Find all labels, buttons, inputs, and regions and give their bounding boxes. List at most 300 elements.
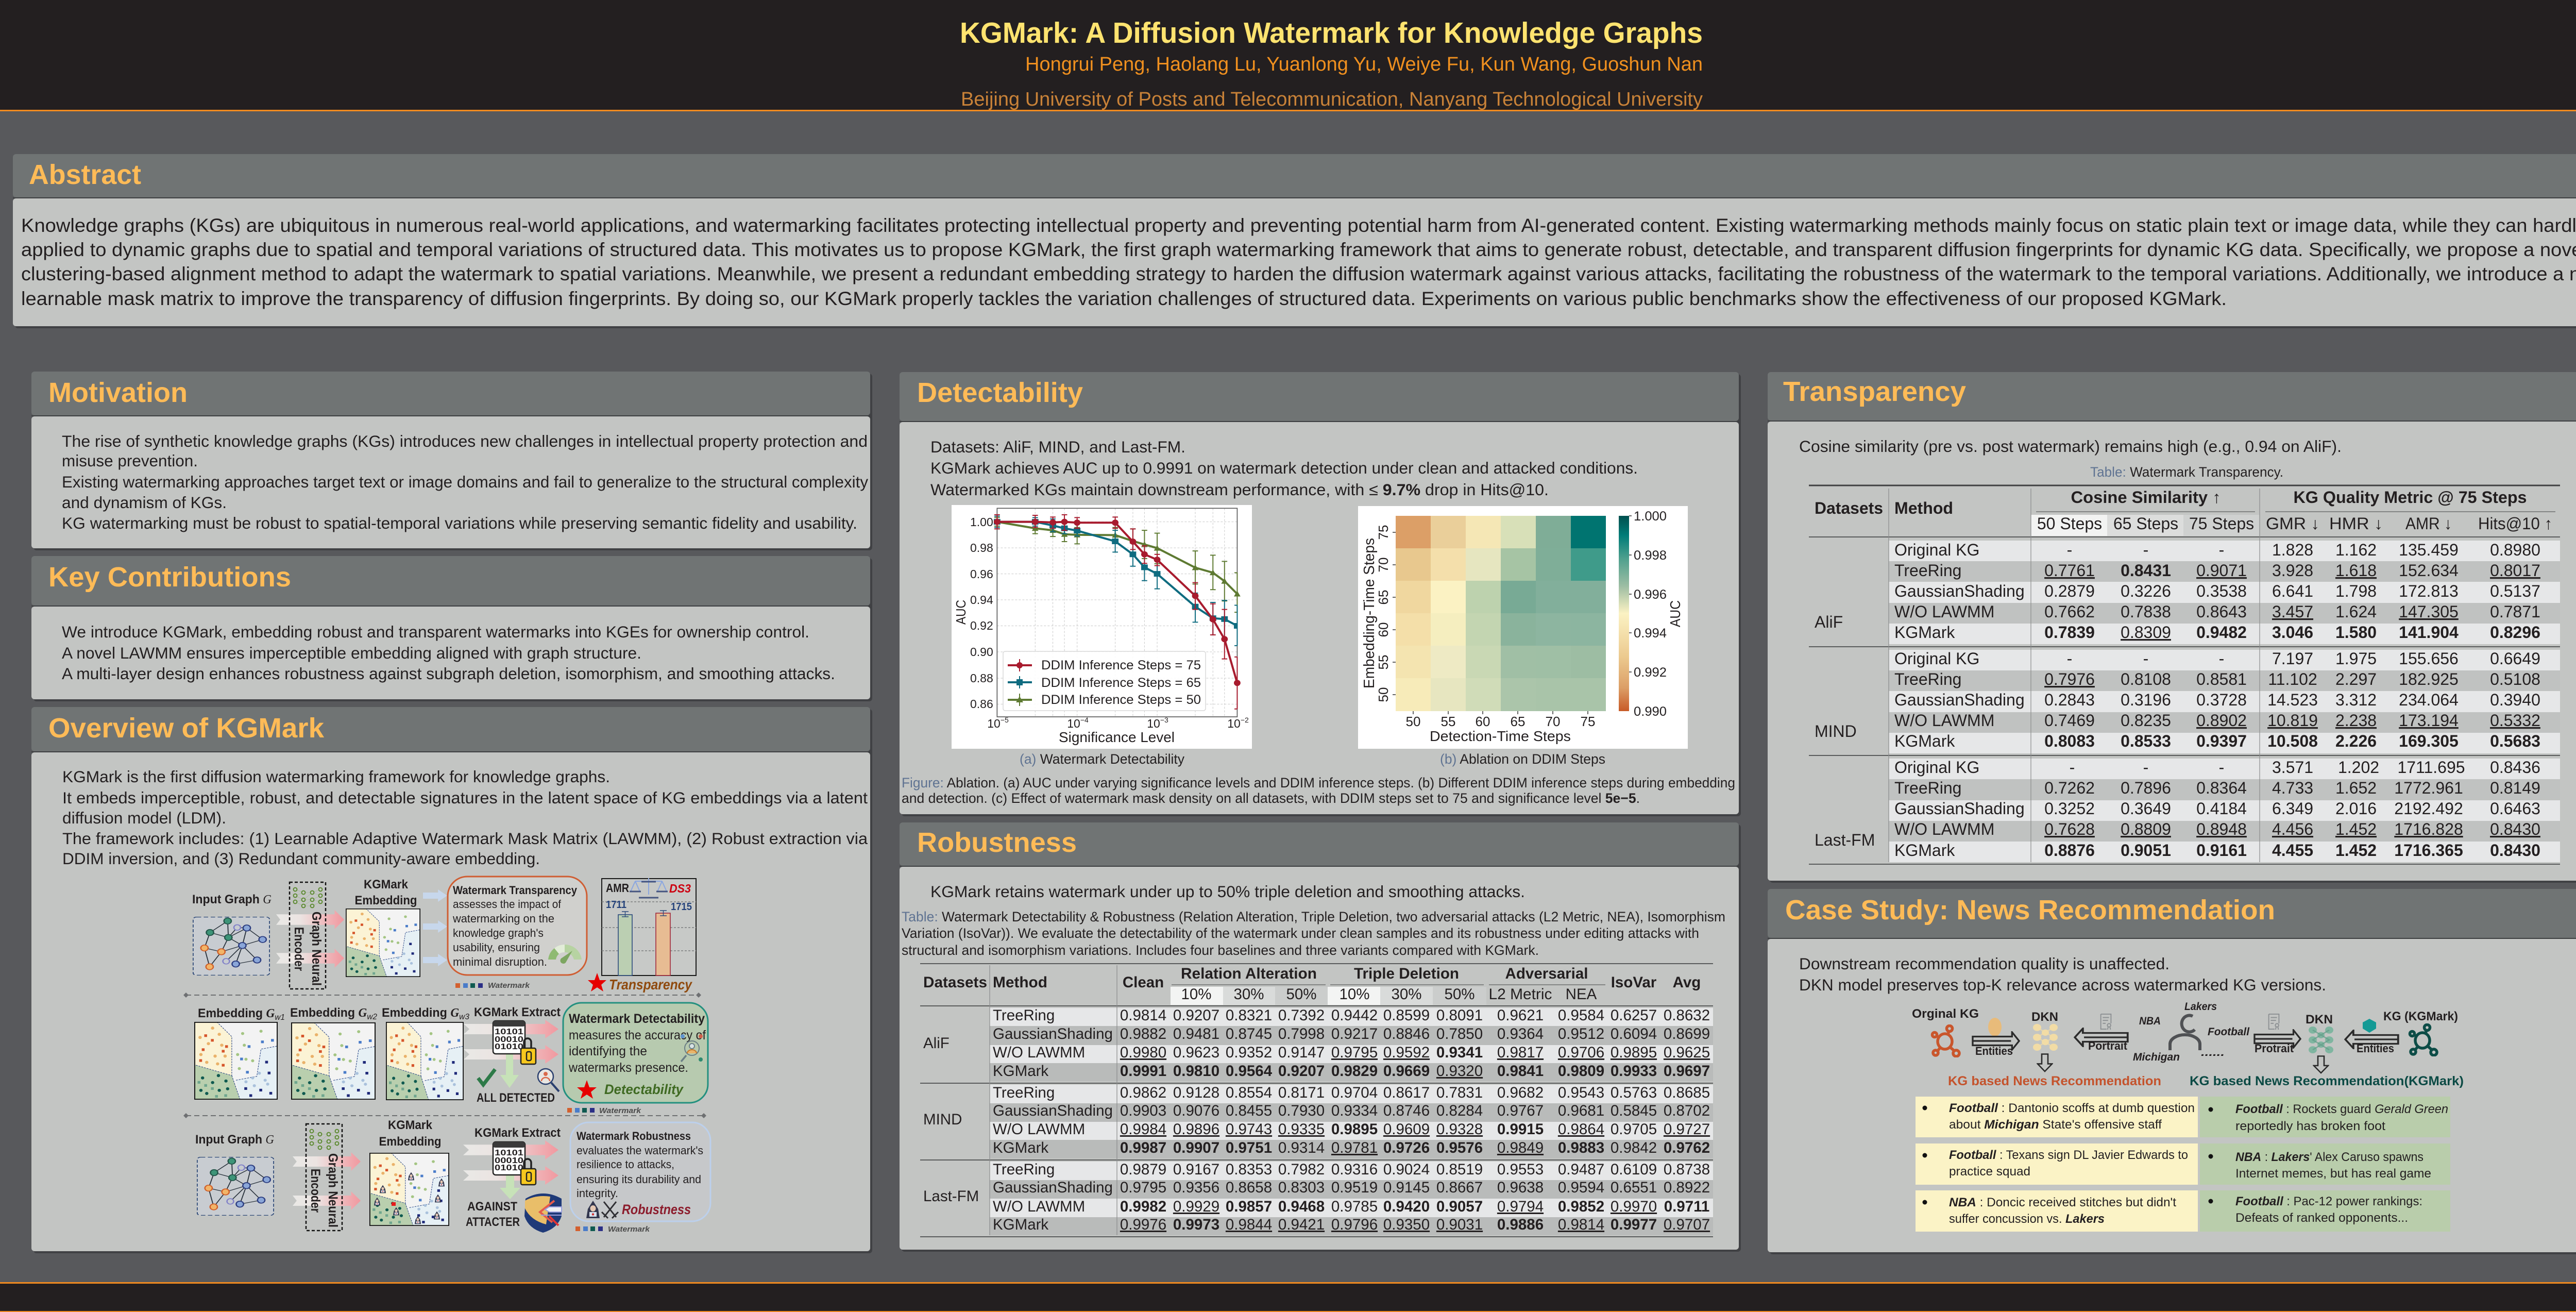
abstract text: Knowledge graphs (KGs) are ubiquitous in numerous real-world applications, and watermarking facilitates protecting intellectual property and preventing potential harm from AI-generated content. Existing watermarking methods mainly focus on static plain text or image data, while they can hardly be <box>21 215 2576 236</box>
x axis label: Significance Level <box>1059 729 1175 745</box>
x axis ticks: 55 <box>1441 714 1455 729</box>
motivation text: misuse prevention. <box>62 451 198 470</box>
graph neural encoder <box>306 1124 342 1231</box>
y axis ticks <box>1376 525 1391 702</box>
table header: 65 Steps <box>2113 514 2178 533</box>
motivation text <box>62 432 868 532</box>
detectability text: KGMark achieves AUC up to 0.9991 on watermark detection under clean and attacked conditions. <box>930 459 1638 477</box>
table group: Last-FM: 0.9051 <box>2121 841 2171 860</box>
table group: Last-FM: 0.9982 <box>1120 1198 1166 1215</box>
table group: AliF: 0.7839 <box>2044 623 2095 642</box>
colour bar ticks: 0.994 <box>1634 626 1667 641</box>
legend: watermark <box>455 981 530 990</box>
table group: MIND: 0.8902 <box>2196 711 2247 730</box>
table group: AliF: 1.580 <box>2335 623 2377 642</box>
table group: AliF: 0.9364 <box>1497 1025 1544 1042</box>
motivation text: KG watermarking must be robust to spatial-temporal variations while preserving semantic fidelity and usability. <box>62 514 857 532</box>
table group: AliF: - <box>2067 541 2072 559</box>
colour bar ticks <box>1629 509 1667 719</box>
table group: MIND: 0.6649 <box>2490 649 2540 668</box>
table group: MIND: 11.102 <box>2268 670 2317 688</box>
table group: MIND: 0.8108 <box>2121 670 2171 688</box>
table group: Last-FM: 0.9879 <box>1120 1161 1166 1178</box>
table header: Cosine Similarity ↑ <box>2071 488 2221 507</box>
table group: Last-FM: 0.9031 <box>1436 1216 1483 1233</box>
table header: 50 Steps <box>2037 514 2102 533</box>
x axis ticks: 70 <box>1546 714 1560 729</box>
y axis ticks: 60 <box>1376 623 1391 637</box>
table header: Avg <box>1673 974 1701 991</box>
table group: AliF: 0.8017 <box>2490 561 2540 580</box>
bar chart: AMR on DS3: DS3 <box>669 882 691 895</box>
panel: case study <box>1768 889 2576 1254</box>
x axis label: Detection-Time Steps <box>1430 728 1571 744</box>
caption: robustness table: structural and isomorphism variations. Includes four baselines and three variants compared with KGMark. <box>902 943 1539 958</box>
table group: AliF: 0.9512 <box>1558 1025 1604 1042</box>
table group: AliF <box>1815 541 2540 642</box>
table group: AliF: 152.634 <box>2399 561 2459 580</box>
legend: DDIM Inference Steps = 75 <box>1041 658 1201 672</box>
colour bar ticks: 0.990 <box>1634 704 1667 719</box>
table group: MIND: 0.8171 <box>1278 1084 1325 1101</box>
table group: Last-FM: GaussianShading <box>1894 799 2025 818</box>
bar chart: AMR on DS3: 1711 <box>606 899 626 911</box>
colour bar ticks: 1.000 <box>1634 509 1667 524</box>
table header: IsoVar <box>1611 974 1657 991</box>
x axis ticks <box>1406 714 1595 729</box>
news list: baseline recommendations: about Michigan State's offensive staff <box>1949 1118 2162 1132</box>
table header: GMR ↓ <box>2266 514 2319 533</box>
table group: MIND: 0.9328 <box>1436 1121 1483 1138</box>
table group: Last-FM: 0.8353 <box>1226 1161 1272 1178</box>
table header <box>923 965 1701 1003</box>
embedding map <box>346 909 420 977</box>
table group: AliF: 147.305 <box>2399 602 2459 621</box>
table group: Last-FM: 0.7262 <box>2044 779 2095 797</box>
table group: MIND: 3.312 <box>2335 691 2377 709</box>
table group: MIND: 0.9862 <box>1120 1084 1166 1101</box>
table header: Datasets <box>923 974 987 991</box>
against attacker label: AGAINST <box>467 1200 517 1214</box>
DKN block (KGMark): DKN <box>2306 1013 2333 1027</box>
table group: MIND: Original KG <box>1894 649 1979 668</box>
table group: Last-FM: 0.9356 <box>1173 1179 1219 1196</box>
line chart: watermark detectability <box>952 505 1252 749</box>
table group: MIND: W/O LAWMM <box>993 1121 1085 1138</box>
table group: AliF: 0.9584 <box>1558 1007 1604 1024</box>
table group: AliF: 0.9481 <box>1173 1025 1219 1042</box>
input graph <box>193 917 269 975</box>
table group: AliF: 0.9352 <box>1226 1044 1272 1061</box>
table group: MIND: 0.8083 <box>2044 732 2095 750</box>
y axis ticks: 0.96 <box>970 567 993 581</box>
caption: subfigures: (b) Ablation on DDIM Steps <box>1440 751 1605 767</box>
table group: Last-FM: TreeRing <box>1894 779 1961 797</box>
table header: Method <box>1894 499 1953 517</box>
x axis ticks <box>987 716 1249 730</box>
table group: Last-FM: 0.9487 <box>1558 1161 1604 1178</box>
table header: 50% <box>1286 986 1317 1003</box>
case study text <box>1799 954 2326 994</box>
divider 1 <box>183 993 701 998</box>
table group: MIND: 0.7930 <box>1278 1102 1325 1119</box>
table group: AliF: 0.8296 <box>2490 623 2540 642</box>
table group: Last-FM: 0.7896 <box>2121 779 2171 797</box>
legend <box>1003 651 1206 711</box>
table group: AliF: AliF <box>1815 613 1843 631</box>
table group: Last-FM: 0.9970 <box>1611 1198 1657 1215</box>
bar chart: AMR on DS3 <box>602 878 696 975</box>
table header: Adversarial <box>1505 965 1588 982</box>
input graph label: Input Graph G <box>195 1133 274 1147</box>
news list: baseline recommendations: Football : Texans sign DL Javier Edwards to <box>1949 1148 2188 1162</box>
input graph label: Input Graph G <box>192 893 272 906</box>
table group: AliF: GaussianShading <box>1894 582 2025 600</box>
table group: Last-FM: 0.6109 <box>1611 1161 1657 1178</box>
KGMark embedding label: Embedding <box>354 894 417 907</box>
arrow: entities to DKN (KGMark) <box>2345 1019 2398 1055</box>
callout: watermark robustness: integrity. <box>577 1187 618 1200</box>
legend: watermark: Watermark <box>599 1106 641 1115</box>
table group: AliF: 0.9814 <box>1120 1007 1166 1024</box>
table group: MIND: 0.9335 <box>1278 1121 1325 1138</box>
table group: Last-FM: 0.9844 <box>1226 1216 1272 1233</box>
table group: Last-FM: KGMark <box>993 1216 1048 1233</box>
table group: AliF: 0.9810 <box>1173 1063 1219 1080</box>
table group: AliF: 0.9071 <box>2196 561 2247 580</box>
table group: AliF: 0.7392 <box>1278 1007 1325 1024</box>
table group: Last-FM: 0.9711 <box>1664 1198 1709 1215</box>
table group: AliF: 0.9592 <box>1383 1044 1430 1061</box>
table group: MIND: 10.819 <box>2267 711 2318 730</box>
table group: AliF: 0.9442 <box>1331 1007 1378 1024</box>
icon: binary extractor: 01010 <box>495 1164 523 1172</box>
table group: MIND <box>1815 649 2540 750</box>
colour bar label: AUC <box>1667 600 1683 627</box>
table group: AliF: 3.457 <box>2272 602 2313 621</box>
affiliations: Beijing University of Posts and Telecommunication, Nanyang Technological University <box>961 89 1703 110</box>
callout: watermark transparency: knowledge graph's <box>453 927 544 939</box>
callout: watermark robustness: evaluates the watermark's <box>577 1144 703 1157</box>
panel: key contributions <box>31 556 872 701</box>
header band <box>0 0 2576 111</box>
table group: AliF: 0.3538 <box>2196 582 2247 600</box>
case study text: Downstream recommendation quality is unaffected. <box>1799 954 2170 973</box>
news list: KGMark recommendations <box>2200 1097 2450 1232</box>
table group: MIND: 0.9849 <box>1497 1139 1544 1156</box>
x axis ticks: 10 <box>1227 717 1241 730</box>
x axis ticks: −2 <box>1241 716 1249 724</box>
y axis ticks: 1.00 <box>970 515 993 529</box>
abstract text: applied to dynamic graphs due to spatial and temporal variations of structured data. This motivates us to propose KGMark, the first graph watermarking framework that aims to generate robust, detectable, and transparent diffusion fingerprints for dynamic KG data. Specifically, we propose a novel <box>21 239 2576 260</box>
news list: KGMark recommendations: Football : Rockets guard Gerald Green <box>2235 1102 2448 1116</box>
caption: figure: Figure: Ablation. (a) AUC under varying significance levels and DDIM inference steps. (b) Different DDIM inference steps during embedding <box>902 775 1735 790</box>
table group: MIND: 0.8581 <box>2196 670 2247 688</box>
green down arrow <box>500 1175 520 1199</box>
table group: AliF: 0.9817 <box>1497 1044 1544 1061</box>
arrow: portrait to DKN <box>2075 1014 2128 1052</box>
table group: MIND <box>923 1084 1710 1156</box>
y axis ticks: 75 <box>1376 525 1391 540</box>
table group: MIND: 0.8702 <box>1664 1102 1710 1119</box>
table group: Last-FM: Last-FM <box>923 1188 979 1205</box>
table header: HMR ↓ <box>2329 514 2383 533</box>
y axis ticks: 65 <box>1376 590 1391 604</box>
caption: subfigures <box>1020 751 1605 767</box>
table group: AliF: 135.459 <box>2399 541 2459 559</box>
KG (KGMark) <box>2383 1010 2458 1055</box>
table group: AliF: 0.3226 <box>2121 582 2171 600</box>
embedding labels: Embedding G <box>290 1006 367 1020</box>
figure row: watermark transparency <box>192 877 696 993</box>
table group: MIND: - <box>2143 649 2148 668</box>
icon: binary extractor: 10101 <box>495 1149 523 1157</box>
y axis ticks: 70 <box>1376 558 1391 572</box>
colour bar ticks: 0.998 <box>1634 548 1667 563</box>
x axis ticks: 65 <box>1511 714 1525 729</box>
table group: AliF: 1.828 <box>2272 541 2313 559</box>
table header: 30% <box>1233 986 1264 1003</box>
table group: Last-FM: 1.452 <box>2335 841 2377 860</box>
table group: MIND: 0.9704 <box>1331 1084 1378 1101</box>
table group: AliF <box>923 1007 1710 1080</box>
table group: MIND: 0.8554 <box>1226 1084 1272 1101</box>
table: transparency <box>1809 485 2560 864</box>
overview text: The framework includes: (1) Learnable Adaptive Watermark Mask Matrix (LAWMM), (2) Robust extraction via <box>62 829 868 848</box>
graph neural encoder: Graph Neural <box>326 1153 340 1227</box>
table group: MIND: 0.7469 <box>2044 711 2095 730</box>
table group: MIND: 0.9915 <box>1497 1121 1544 1138</box>
table group: Last-FM: 6.349 <box>2272 799 2313 818</box>
table group: MIND: 2.226 <box>2335 732 2377 750</box>
all detected label: ALL DETECTED <box>477 1091 555 1105</box>
table group: Last-FM: KGMark <box>1894 841 1955 860</box>
table group: Last-FM: 0.9638 <box>1497 1179 1544 1196</box>
table group: Last-FM: 0.9421 <box>1278 1216 1325 1233</box>
table group: Last-FM: 2192.492 <box>2394 799 2463 818</box>
news list: KGMark recommendations: reportedly has broken foot <box>2235 1119 2385 1133</box>
KGMark embedding label <box>379 1118 441 1149</box>
caption: figure <box>902 775 1735 806</box>
table header: 10% <box>1339 986 1370 1003</box>
table group: MIND: 0.9681 <box>1558 1102 1604 1119</box>
KGMark embedding label: KGMark <box>388 1118 433 1132</box>
table group: MIND: 0.9903 <box>1120 1102 1166 1119</box>
icon: detection people <box>681 1034 703 1062</box>
table group: Last-FM: 1711.695 <box>2397 758 2465 777</box>
star <box>577 1080 597 1099</box>
table group: AliF: 0.9809 <box>1558 1063 1604 1080</box>
table group: MIND: 0.9751 <box>1226 1139 1272 1156</box>
table group: MIND: 0.9907 <box>1173 1139 1219 1156</box>
table group: AliF: TreeRing <box>1894 561 1961 580</box>
table group: MIND: 0.5108 <box>2490 670 2540 688</box>
authors: Hongrui Peng, Haolang Lu, Yuanlong Yu, Weiye Fu, Kun Wang, Guoshun Nan <box>1025 54 1703 75</box>
legend: DDIM Inference Steps = 50 <box>1041 693 1201 707</box>
gradient arrows into embedding <box>293 1152 361 1210</box>
overview text: DDIM inversion, and (3) Redundant community-aware embedding. <box>62 849 540 868</box>
table group: AliF: 0.9795 <box>1331 1044 1378 1061</box>
input graph <box>197 1157 274 1216</box>
table group: Last-FM: 0.9785 <box>1331 1198 1378 1215</box>
table group: AliF: 0.9991 <box>1120 1063 1166 1080</box>
table group: Last-FM: Original KG <box>1894 758 1979 777</box>
table group: Last-FM: 3.571 <box>2272 758 2313 777</box>
table group: Last-FM: 1716.365 <box>2394 841 2463 860</box>
user portrait: Lakers <box>2184 1001 2217 1013</box>
table group: Last-FM: GaussianShading <box>993 1179 1113 1196</box>
callout: watermark detectability: watermarks presence. <box>568 1061 688 1075</box>
bar chart: AMR on DS3: 1715 <box>671 901 692 913</box>
table shading <box>920 964 1713 1237</box>
table group: Last-FM: 1.452 <box>2335 820 2377 838</box>
table group: MIND: 0.9727 <box>1664 1121 1710 1138</box>
news list: baseline recommendations: practice squad <box>1949 1165 2030 1179</box>
table group: MIND: 2.297 <box>2335 670 2377 688</box>
x axis ticks: −5 <box>1001 716 1009 724</box>
table group: MIND: 0.9896 <box>1173 1121 1219 1138</box>
callout: watermark transparency <box>448 877 587 975</box>
table group: AliF: 1.162 <box>2335 541 2377 559</box>
arrow: portrait to DKN: Portrait <box>2088 1039 2128 1052</box>
table group: AliF: 0.9623 <box>1173 1044 1219 1061</box>
table group: Last-FM: 1.652 <box>2335 779 2377 797</box>
table group: MIND: 0.3940 <box>2490 691 2540 709</box>
contributions text <box>62 623 835 683</box>
table group: Last-FM: 0.7628 <box>2044 820 2095 838</box>
table group: MIND: 0.9743 <box>1226 1121 1272 1138</box>
table group: Last-FM: W/O LAWMM <box>1894 820 1994 838</box>
table group: Last-FM: 0.9161 <box>2196 841 2247 860</box>
table group: Last-FM: 0.8430 <box>2490 841 2540 860</box>
original KG <box>1912 1007 1979 1056</box>
user portrait <box>2133 1001 2250 1063</box>
news list: baseline recommendations: suffer concussion vs. Lakers <box>1949 1212 2105 1226</box>
table group: MIND: 0.9576 <box>1436 1139 1483 1156</box>
table group: MIND: - <box>2219 649 2224 668</box>
table group: AliF: 0.7761 <box>2044 561 2095 580</box>
heading: abstract: Abstract <box>29 159 141 190</box>
table group: Last-FM: 1772.961 <box>2394 779 2463 797</box>
table group: AliF: KGMark <box>993 1063 1048 1080</box>
table group: Last-FM: W/O LAWMM <box>993 1198 1085 1215</box>
table group: MIND: - <box>2067 649 2072 668</box>
detectability text <box>930 438 1638 499</box>
icon: binary extractor <box>493 1142 536 1185</box>
table group: MIND: 155.656 <box>2399 649 2459 668</box>
panel: detectability <box>900 372 1741 816</box>
x axis ticks: 10 <box>1147 717 1160 730</box>
caption: figure: and detection. (c) Effect of watermark mask density on all datasets, with DDIM steps set to 75 and significance level 5e−5. <box>902 790 1640 806</box>
embedding labels: Embedding G <box>198 1006 275 1020</box>
contributions text: A multi-layer design enhances robustness against subgraph deletion, isomorphism, and smoothing attacks. <box>62 664 835 683</box>
table group: MIND: TreeRing <box>1894 670 1961 688</box>
table group: AliF: 0.8309 <box>2121 623 2171 642</box>
table group: MIND: 0.8746 <box>1383 1102 1430 1119</box>
heading: detectability: Detectability <box>917 377 1083 408</box>
arrow: entities to DKN <box>1973 1018 2019 1057</box>
table group: AliF: 0.9829 <box>1331 1063 1378 1080</box>
y axis ticks: 0.92 <box>970 619 993 632</box>
label: KG based recommendation (KGMark): KG based News Recommendation(KGMark) <box>2190 1074 2464 1088</box>
y axis ticks: 50 <box>1376 687 1391 702</box>
table group: Last-FM: 0.9024 <box>1383 1161 1430 1178</box>
heading: transparency: Transparency <box>1783 376 1966 407</box>
table group: MIND: 0.9883 <box>1558 1139 1604 1156</box>
table group: AliF: 0.9841 <box>1497 1063 1544 1080</box>
table group: MIND: 0.3196 <box>2121 691 2171 709</box>
heading: overview: Overview of KGMark <box>48 713 325 744</box>
heading: robustness: Robustness <box>917 827 1077 858</box>
table group: AliF: 0.9621 <box>1497 1007 1544 1024</box>
table group: MIND: 234.064 <box>2399 691 2459 709</box>
table group: MIND: MIND <box>923 1111 962 1128</box>
table group: MIND: 0.3728 <box>2196 691 2247 709</box>
table group: Last-FM: 0.9420 <box>1383 1198 1430 1215</box>
figure row: watermark robustness <box>195 1118 710 1234</box>
table group: Last-FM: 0.8364 <box>2196 779 2247 797</box>
table group: Last-FM: - <box>2070 758 2075 777</box>
heading: motivation: Motivation <box>48 377 188 408</box>
colour bar ticks: 0.996 <box>1634 587 1667 602</box>
news list: KGMark recommendations: NBA : Lakers' Alex Caruso spawns <box>2235 1150 2424 1164</box>
table group: Last-FM: 0.4184 <box>2196 799 2247 818</box>
table: robustness <box>920 964 1713 1237</box>
table group: Last-FM: 1716.828 <box>2394 820 2463 838</box>
table group: AliF: 1.618 <box>2335 561 2377 580</box>
embedding labels <box>198 1006 469 1022</box>
heading: case study: Case Study: News Recommendation <box>1785 895 2275 926</box>
table group: Last-FM: 0.9977 <box>1611 1216 1657 1233</box>
table group: Last-FM: 0.9929 <box>1173 1198 1219 1215</box>
table group: Last-FM: - <box>2219 758 2224 777</box>
table group: Last-FM: 0.6551 <box>1611 1179 1657 1196</box>
table group: Last-FM: 0.9796 <box>1331 1216 1378 1233</box>
table group: AliF: 141.904 <box>2399 623 2459 642</box>
y axis label: Embedding-Time Steps <box>1361 538 1378 688</box>
graph neural encoder: Graph Neural <box>309 912 324 986</box>
table header: Clean <box>1123 974 1164 991</box>
table group: MIND: 0.9781 <box>1331 1139 1378 1156</box>
green down arrow <box>500 1053 519 1088</box>
table group: MIND: GaussianShading <box>1894 691 2025 709</box>
table group: Last-FM: 0.6463 <box>2490 799 2540 818</box>
table group: AliF: W/O LAWMM <box>1894 602 1994 621</box>
callout: watermark robustness <box>570 1122 710 1221</box>
table group: AliF: 0.6094 <box>1611 1025 1657 1042</box>
figure row: watermark detectability <box>194 1003 708 1115</box>
table group: AliF: 0.9341 <box>1436 1044 1483 1061</box>
arrow: entities to DKN (KGMark): Entities <box>2357 1042 2394 1055</box>
table group: MIND: 182.925 <box>2399 670 2459 688</box>
table group: AliF: - <box>2143 541 2148 559</box>
table group: Last-FM: 0.9814 <box>1558 1216 1604 1233</box>
detectability text: Watermarked KGs maintain downstream performance, with ≤ 9.7% drop in Hits@10. <box>930 480 1549 499</box>
table group: Last-FM: 0.9852 <box>1558 1198 1604 1215</box>
table group: MIND: KGMark <box>1894 732 1955 750</box>
table group: MIND: 0.9609 <box>1383 1121 1430 1138</box>
overview text: diffusion model (LDM). <box>62 809 226 827</box>
table header <box>1815 488 2552 533</box>
table group: MIND: 0.5763 <box>1611 1084 1657 1101</box>
table group: MIND: 2.238 <box>2335 711 2377 730</box>
icon: binary extractor: 10101 <box>495 1028 523 1036</box>
heatmap: ablation on DDIM steps <box>1358 506 1688 749</box>
news list: KGMark recommendations: Defeats of ranked opponents... <box>2235 1211 2408 1225</box>
table group: MIND: 169.305 <box>2399 732 2459 750</box>
table group: AliF: TreeRing <box>993 1007 1055 1024</box>
table group: AliF: 0.8699 <box>1664 1025 1710 1042</box>
